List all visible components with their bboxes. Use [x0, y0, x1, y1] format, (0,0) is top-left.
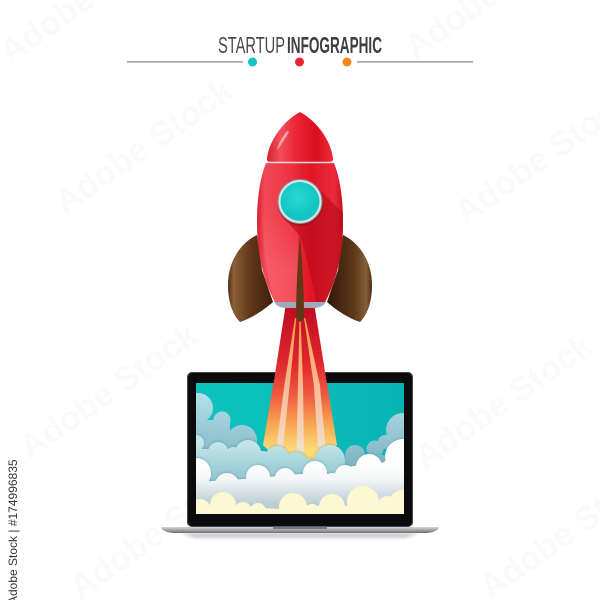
nose highlight — [277, 131, 289, 150]
stock id: Adobe Stock | #174996835 — [6, 459, 20, 600]
engine nozzle — [274, 301, 326, 308]
laptop — [161, 372, 439, 538]
watermark: Adobe Stock — [13, 316, 205, 467]
laptop bezel — [187, 372, 413, 527]
screen scene — [196, 383, 404, 514]
left fin — [228, 235, 273, 322]
center fin — [296, 235, 304, 322]
laptop shadow — [180, 533, 420, 538]
back clouds — [196, 393, 404, 467]
silver band — [267, 162, 333, 164]
middle clouds — [196, 434, 346, 482]
right fin — [327, 235, 372, 322]
title: STARTUP — [218, 32, 285, 58]
cream clouds — [196, 486, 404, 514]
white clouds — [196, 438, 404, 509]
laptop hinge notch — [273, 526, 327, 529]
title divider with three dots — [127, 58, 473, 66]
window cast shadow — [284, 186, 346, 302]
lower left highlight — [262, 223, 298, 302]
flame streaks above screen — [285, 318, 296, 384]
flame lower part on screen — [263, 383, 337, 462]
title: INFOGRAPHIC — [287, 32, 382, 58]
sky — [196, 383, 404, 462]
rocket — [228, 112, 372, 322]
nose cone — [267, 112, 333, 162]
laptop base — [161, 527, 439, 533]
watermark: Adobe Stock — [408, 326, 600, 477]
flame streaks on screen — [276, 383, 290, 447]
rocket body — [257, 163, 343, 302]
watermark: Adobe Stock — [48, 71, 240, 222]
title — [218, 32, 382, 58]
laptop edge highlight — [188, 372, 412, 526]
porthole window — [278, 180, 324, 226]
exhaust flame above screen — [274, 303, 327, 384]
